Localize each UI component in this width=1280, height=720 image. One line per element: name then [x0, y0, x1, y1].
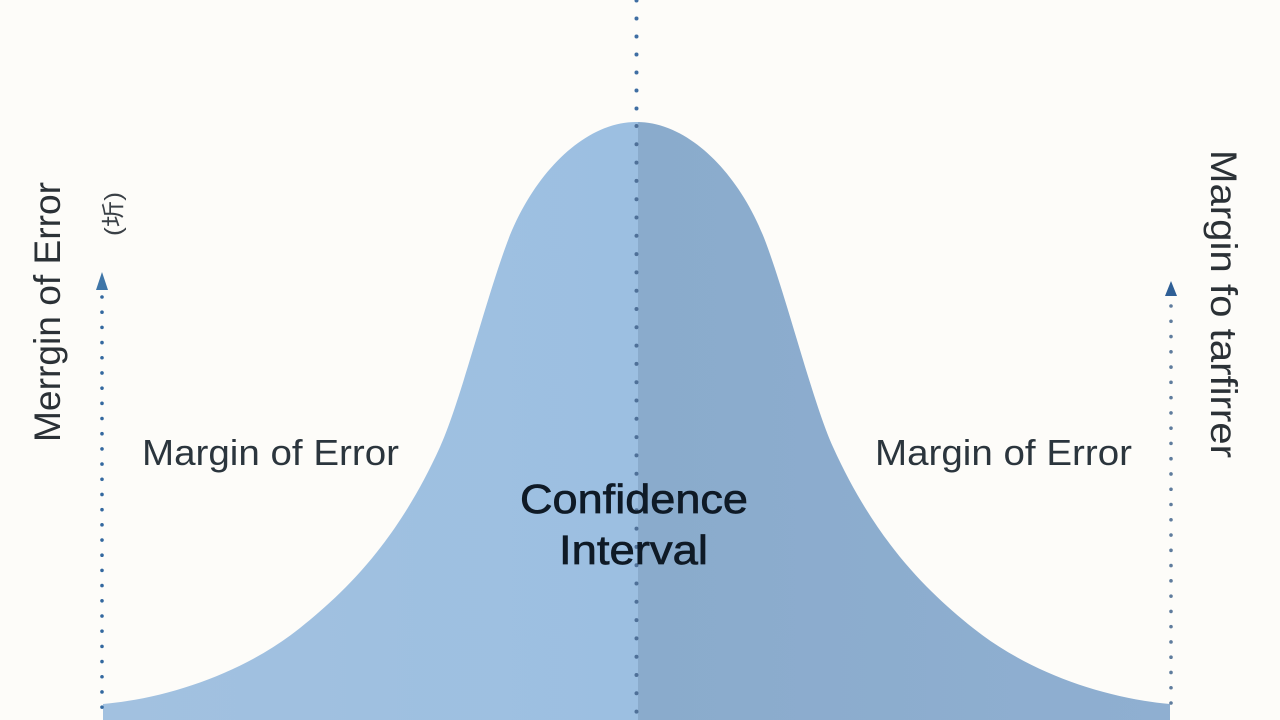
center dotted line	[634, 0, 638, 720]
right rotated label: Margin fo tarfirrer	[1203, 150, 1244, 458]
curve: right half	[637, 122, 1170, 720]
curve: left half	[103, 122, 640, 720]
label: right margin of error: Margin of Error	[875, 432, 1132, 473]
bell curve	[103, 122, 1170, 720]
arrow: right dotted	[1165, 281, 1177, 712]
arrow: left dotted	[96, 272, 108, 710]
left rotated label: Merrgin of Error	[27, 182, 68, 442]
center label: confidence interval: Interval	[559, 527, 708, 573]
small rotated symbol: (圻)	[100, 192, 126, 236]
label: left margin of error: Margin of Error	[142, 432, 399, 473]
center label: confidence interval: Confidence	[520, 476, 748, 522]
center label: confidence interval	[520, 476, 748, 573]
